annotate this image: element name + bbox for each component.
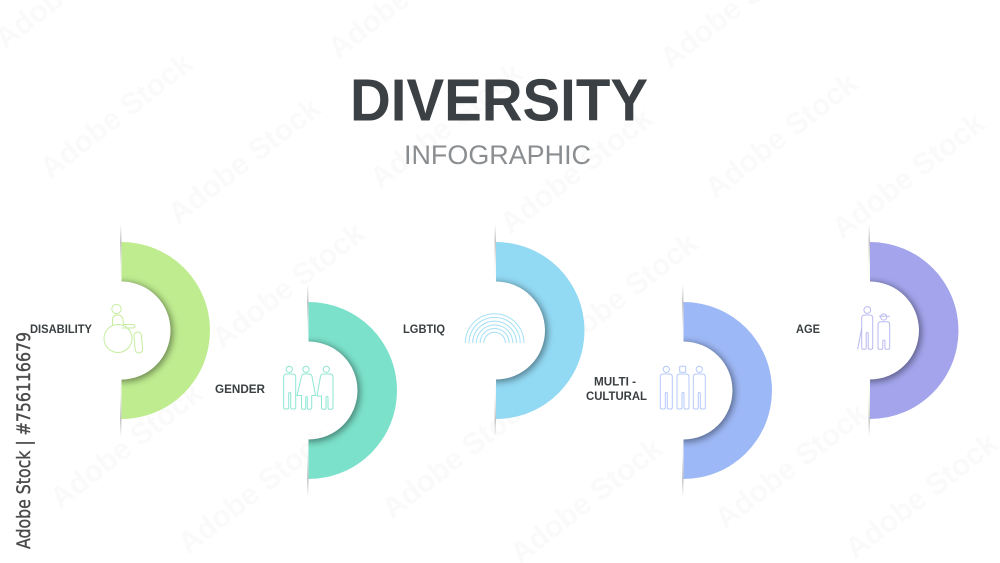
panel: disability [30,224,210,436]
label: multi-cultural [586,374,647,403]
half ring: disability [120,227,210,434]
text: Adobe Stock [162,91,327,231]
icon: gender figures [284,366,333,409]
half ring: age [868,227,958,434]
icon: wheelchair user [104,304,143,353]
icon: rainbow [465,314,524,343]
stock id text: Adobe Stock | #756116679 [13,332,35,549]
icon: elder and child [858,307,890,349]
label: multi-cultural: MULTI - [594,374,636,388]
half ring: gender [307,287,397,494]
title: DIVERSITY [350,68,648,134]
panel: lgbtiq [403,224,584,436]
text: Adobe Stock [172,421,337,561]
half ring: multi-cultural [682,287,772,494]
panel: gender [215,284,397,496]
label: gender: GENDER [215,382,265,396]
text: Adobe Stock [709,396,874,536]
half ring: lgbtiq [494,227,584,434]
label: disability: DISABILITY [30,322,92,336]
text: Adobe Stock [206,216,371,356]
text: Adobe Stock [364,56,529,196]
text: Adobe Stock [376,386,541,526]
panel: multi-cultural [586,284,772,496]
text: Adobe Stock [826,106,991,246]
label: multi-cultural: CULTURAL [586,389,647,403]
label: age: AGE [796,322,820,336]
panel: age [796,224,958,436]
text: Adobe Stock [34,46,199,186]
text: Adobe Stock [699,66,864,206]
text: Adobe Stock [44,376,209,516]
icon: multicultural figures [660,366,705,409]
label: lgbtiq: LGBTIQ [403,322,445,336]
subtitle: INFOGRAPHIC [404,140,591,170]
text: Adobe Stock [539,226,704,366]
text: Adobe Stock [494,101,659,241]
